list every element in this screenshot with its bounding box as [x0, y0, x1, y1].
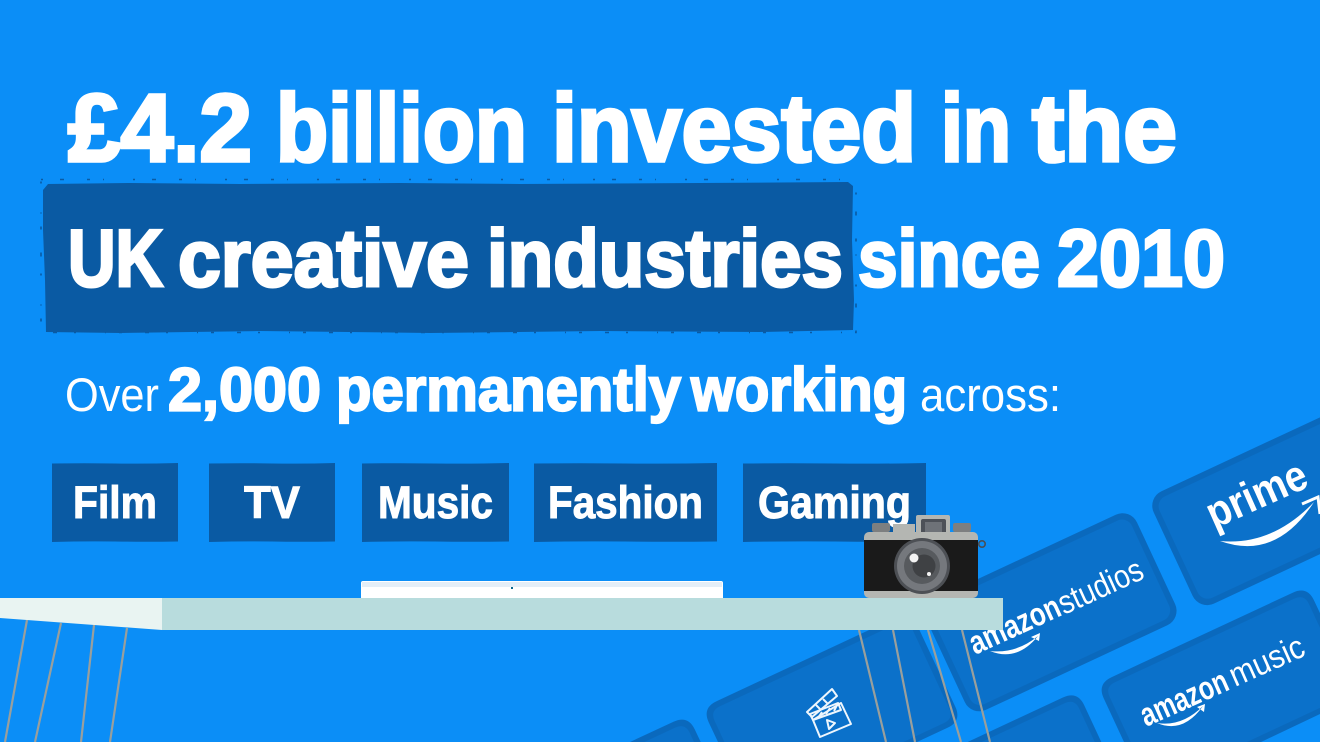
subheading: working [690, 356, 907, 424]
key: prime [1147, 400, 1320, 610]
tag: Film [52, 463, 178, 542]
tag: TV [209, 463, 335, 542]
tag: Music: Music [378, 477, 493, 528]
key: film clapperboard [707, 615, 957, 742]
tag: Fashion [534, 463, 717, 542]
heading highlight: rough dark blue block [41, 180, 856, 333]
keyboard of amazon keys [630, 400, 1320, 742]
shelf [0, 598, 1003, 630]
title line 2 end: 2010 [1057, 214, 1225, 304]
key: amazon music [1102, 591, 1320, 742]
shelf legs [5, 620, 990, 742]
tag: Film: Film [73, 477, 157, 528]
title line 2 highlighted [68, 214, 843, 304]
title line 1 [68, 75, 1177, 182]
tag: Gaming [743, 463, 926, 542]
subheading: permanently [336, 356, 681, 424]
tag: Fashion: Fashion [548, 477, 703, 528]
title line 2 highlighted: industries [487, 214, 843, 304]
arrow smile [1220, 502, 1314, 546]
subheading: 2,000 [168, 356, 321, 424]
tag: Gaming: Gaming [758, 477, 911, 528]
title line 2 end: since [858, 214, 1040, 304]
title line 2 end [858, 214, 1225, 304]
tag: TV: TV [244, 477, 300, 528]
key: amazon studios [920, 508, 1182, 717]
key: far bottom left [630, 720, 701, 742]
key: lower middle [968, 695, 1101, 742]
title line 1: billion [276, 75, 527, 182]
title line 1: invested [552, 75, 916, 182]
title line 2 highlighted: UK [68, 214, 163, 304]
laptop on shelf [361, 581, 723, 598]
amazon music logo: amazon [1134, 662, 1234, 733]
title line 1: the [1032, 75, 1177, 182]
tag: Music [362, 463, 509, 542]
subheading: Over [65, 368, 159, 421]
subheading [65, 356, 1061, 424]
amazon studios logo: studios [1052, 550, 1149, 621]
amazon music logo [1134, 627, 1310, 733]
title line 1: £4.2 [68, 75, 252, 182]
title line 1: in [941, 75, 1011, 182]
subheading: across: [920, 368, 1061, 421]
icon: clapperboard [807, 689, 851, 737]
icon: camera [864, 515, 985, 598]
amazon studios logo [963, 550, 1149, 661]
arrow smile [1157, 704, 1205, 726]
amazon studios logo: amazon [963, 587, 1066, 661]
arrow head [1302, 497, 1320, 514]
title line 2 highlighted: creative [178, 214, 469, 304]
amazon music logo: music [1223, 627, 1310, 693]
arrow smile [990, 633, 1040, 654]
